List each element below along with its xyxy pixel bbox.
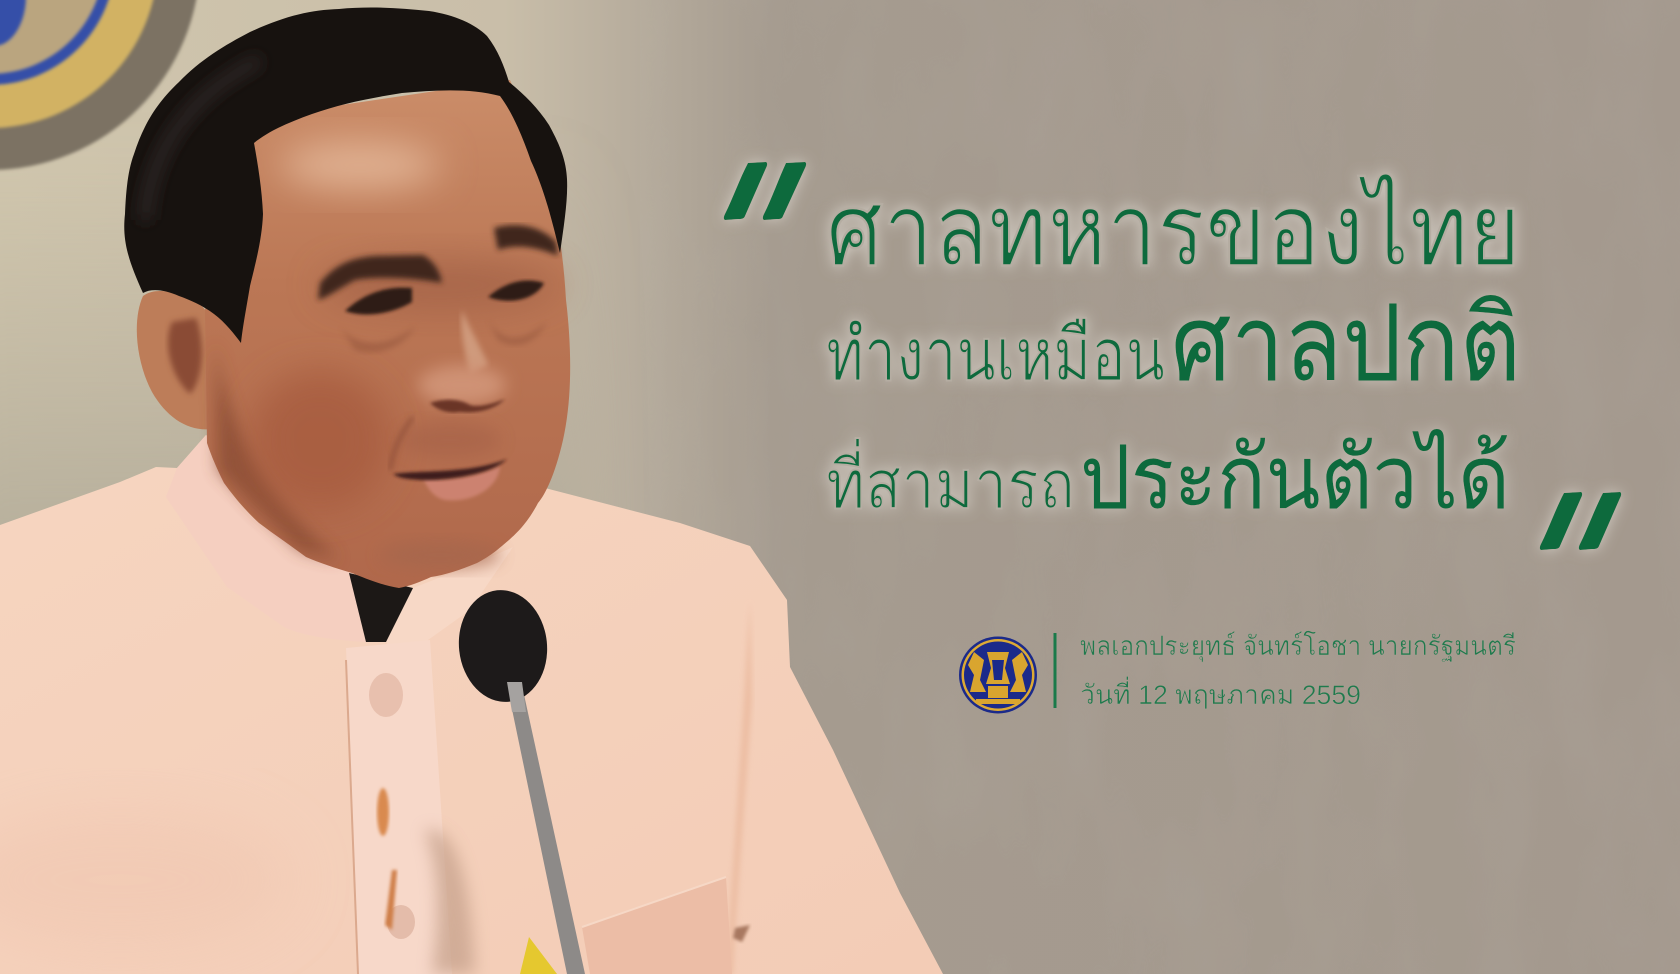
jacket button lower: [387, 905, 415, 939]
pocket seam: [582, 877, 726, 927]
inner ear shadow: [168, 318, 202, 394]
quote line 1: ศาลทหารของไทย: [826, 173, 1521, 287]
seal base: [988, 686, 1008, 698]
right eye: [488, 281, 544, 301]
right eyebrow: [494, 225, 558, 256]
jacket body: [0, 435, 943, 974]
cheek redness: [250, 370, 390, 510]
cheek shadow left: [215, 340, 340, 560]
opening quote mark: [724, 162, 806, 220]
date: วันที่ 12 พฤษภาคม 2559: [1080, 676, 1361, 710]
seal vase centre: [992, 660, 1004, 680]
attribution divider: [1054, 633, 1056, 708]
nose tip: [418, 365, 506, 405]
body shade low left: [0, 810, 290, 950]
under eye bag left: [337, 322, 415, 352]
left eyebrow: [318, 255, 442, 300]
sleeve fold: [733, 925, 750, 942]
quote text: [724, 162, 1621, 550]
speaker portrait: [0, 8, 943, 974]
mouth line: [393, 459, 507, 480]
speaker name: พลเอกประยุทธ์ จันทร์โอชา นายกรัฐมนตรี: [1080, 630, 1516, 663]
face: [205, 80, 570, 588]
brow shadow band: [320, 259, 560, 311]
wall lower left shade: [0, 150, 580, 650]
jacket button upper: [369, 673, 403, 717]
attribution: [1080, 630, 1516, 710]
forehead highlight: [280, 141, 440, 189]
mustache shadow: [400, 422, 500, 458]
seal right guardian: [1010, 652, 1028, 692]
stain lower: [385, 870, 397, 930]
placket: [346, 640, 452, 974]
line 2 large part: ศาลปกติ: [1171, 285, 1521, 403]
pin badge: [520, 937, 557, 974]
stain upper: [377, 788, 389, 836]
neck opening: [349, 573, 413, 642]
government seal: [959, 636, 1037, 714]
hair: [124, 8, 567, 343]
line 3 light part: ที่สามารถ: [826, 438, 1075, 523]
under eye bag right: [487, 318, 547, 345]
nose fold: [390, 417, 413, 470]
seal lower band: [976, 699, 1020, 704]
quote line 3: [826, 428, 1510, 527]
collar right: [386, 547, 513, 660]
placket edge: [346, 660, 358, 974]
quote line 2: [826, 285, 1521, 403]
line 3 large part: ประกันตัวได้: [1080, 428, 1510, 527]
emblem on wall, top left: [0, 0, 200, 170]
microphone neck: [507, 682, 526, 712]
microphone stem: [508, 690, 585, 974]
shadow on jacket: [425, 830, 475, 974]
collar: [166, 435, 366, 642]
nose bridge highlight: [461, 310, 488, 375]
line 2 light part: ทำงานเหมือน: [826, 313, 1165, 396]
seal left guardian: [968, 652, 986, 692]
wall texture: [640, 0, 1680, 974]
ear: [137, 291, 232, 429]
nostril: [430, 399, 505, 413]
chin shade: [380, 541, 500, 569]
microphone head: [453, 586, 553, 706]
lower lip: [423, 466, 500, 500]
vest edge shading: [726, 600, 752, 974]
left eye: [345, 288, 412, 314]
pocket: [582, 877, 732, 974]
seal vase: [986, 652, 1010, 684]
closing quote mark: [1540, 492, 1621, 550]
hair sheen: [145, 60, 260, 220]
